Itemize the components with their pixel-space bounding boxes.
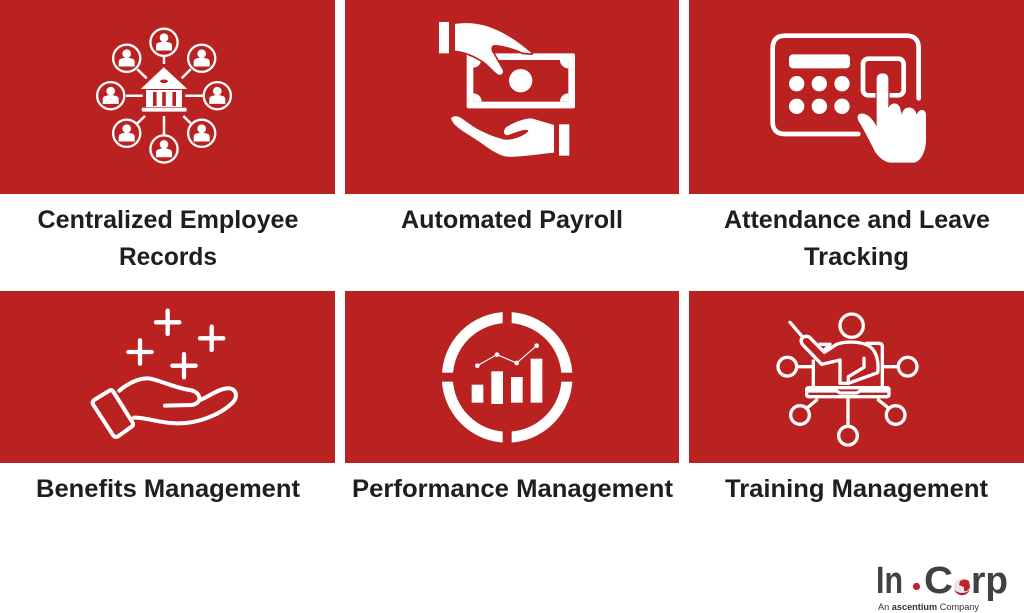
icon: keypad with pointing hand (773, 36, 926, 163)
panel: Training Management (689, 291, 1024, 503)
heading: Attendance and Leave Tracking: Tracking (804, 243, 909, 271)
logo: InCorp: An ascentium Company (878, 602, 979, 612)
heading: Attendance and Leave Tracking: Attendance and Leave (724, 206, 990, 234)
heading: Benefits Management: Benefits Management (36, 475, 301, 503)
panel: Attendance and Leave Tracking (689, 0, 1024, 271)
logo: InCorp: rp (971, 560, 1008, 602)
heading: Centralized Employee Records: Records (119, 243, 217, 271)
icon: bank connected to employees (97, 29, 231, 163)
logo: InCorp: In (876, 560, 903, 602)
icon: open hand with plus signs (93, 311, 236, 437)
heading: Automated Payroll: Automated Payroll (401, 206, 623, 234)
heading: Performance Management: Performance Management (352, 475, 674, 503)
logo: InCorp (876, 560, 1008, 612)
panel: Automated Payroll (345, 0, 679, 234)
icon: chart in segmented ring (437, 307, 578, 448)
panel: Benefits Management (0, 291, 335, 503)
panel: Performance Management (345, 291, 679, 503)
heading: Centralized Employee Records: Centralized Employee (38, 206, 299, 234)
icon: trainer at laptop with network nodes (778, 314, 917, 445)
heading: Attendance and Leave Tracking (724, 206, 990, 271)
heading: Centralized Employee Records (38, 206, 299, 271)
logo: InCorp: C (924, 560, 953, 602)
heading: Training Management: Training Management (725, 475, 989, 503)
icon: hands exchanging money (439, 22, 575, 157)
panel: Centralized Employee Records (0, 0, 335, 271)
